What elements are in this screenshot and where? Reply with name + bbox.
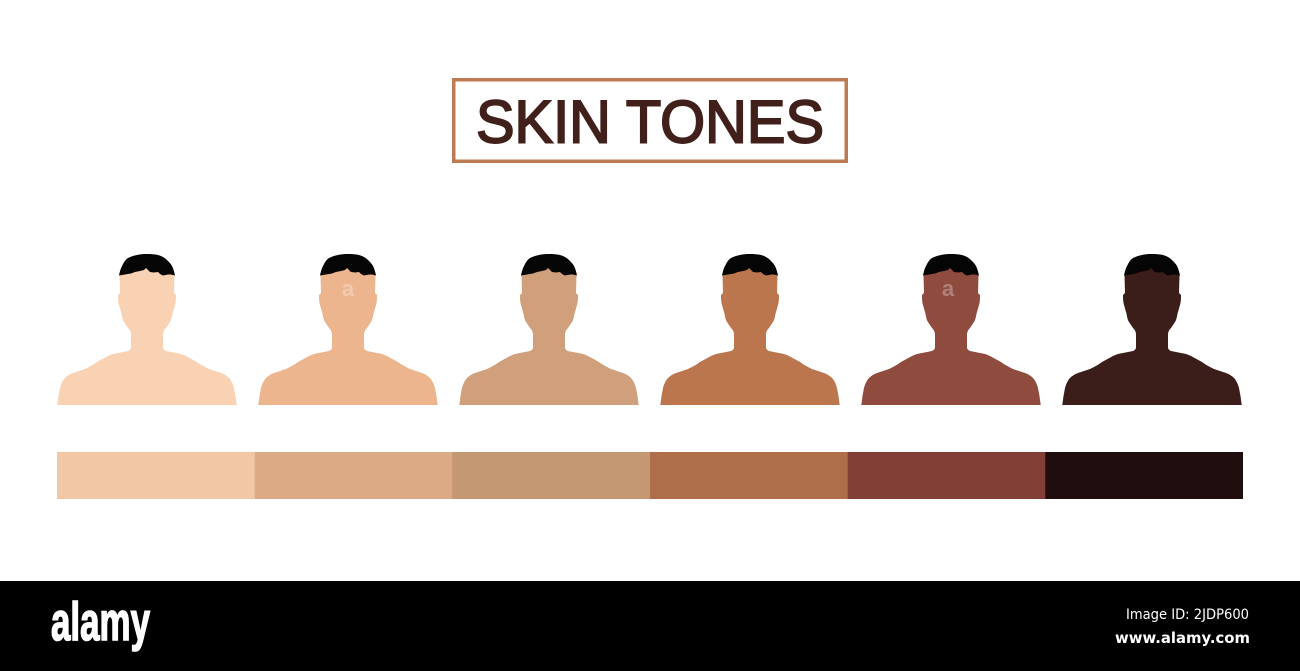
colour swatch bar — [57, 452, 1243, 499]
faint watermark glyphs on heads: a — [342, 276, 355, 301]
title box — [454, 80, 846, 161]
faint watermark glyphs on heads: a — [942, 276, 955, 301]
website: www.alamy.com — [1115, 629, 1250, 647]
figure 6: darkest skin tone — [1062, 254, 1242, 405]
alamy logo: alamy — [51, 592, 150, 652]
footer band — [0, 581, 1300, 671]
image id: Image ID: 2JDP600 — [1126, 607, 1249, 623]
figure 5: brown skin tone — [861, 254, 1041, 405]
figure 2: light skin tone — [258, 254, 438, 405]
title text: SKIN TONES — [476, 88, 824, 156]
figure 1: lightest skin tone — [57, 254, 237, 405]
faint watermark glyphs on heads — [342, 276, 955, 301]
figure 3: medium skin tone — [459, 254, 639, 405]
figure 4: tan skin tone — [660, 254, 840, 405]
